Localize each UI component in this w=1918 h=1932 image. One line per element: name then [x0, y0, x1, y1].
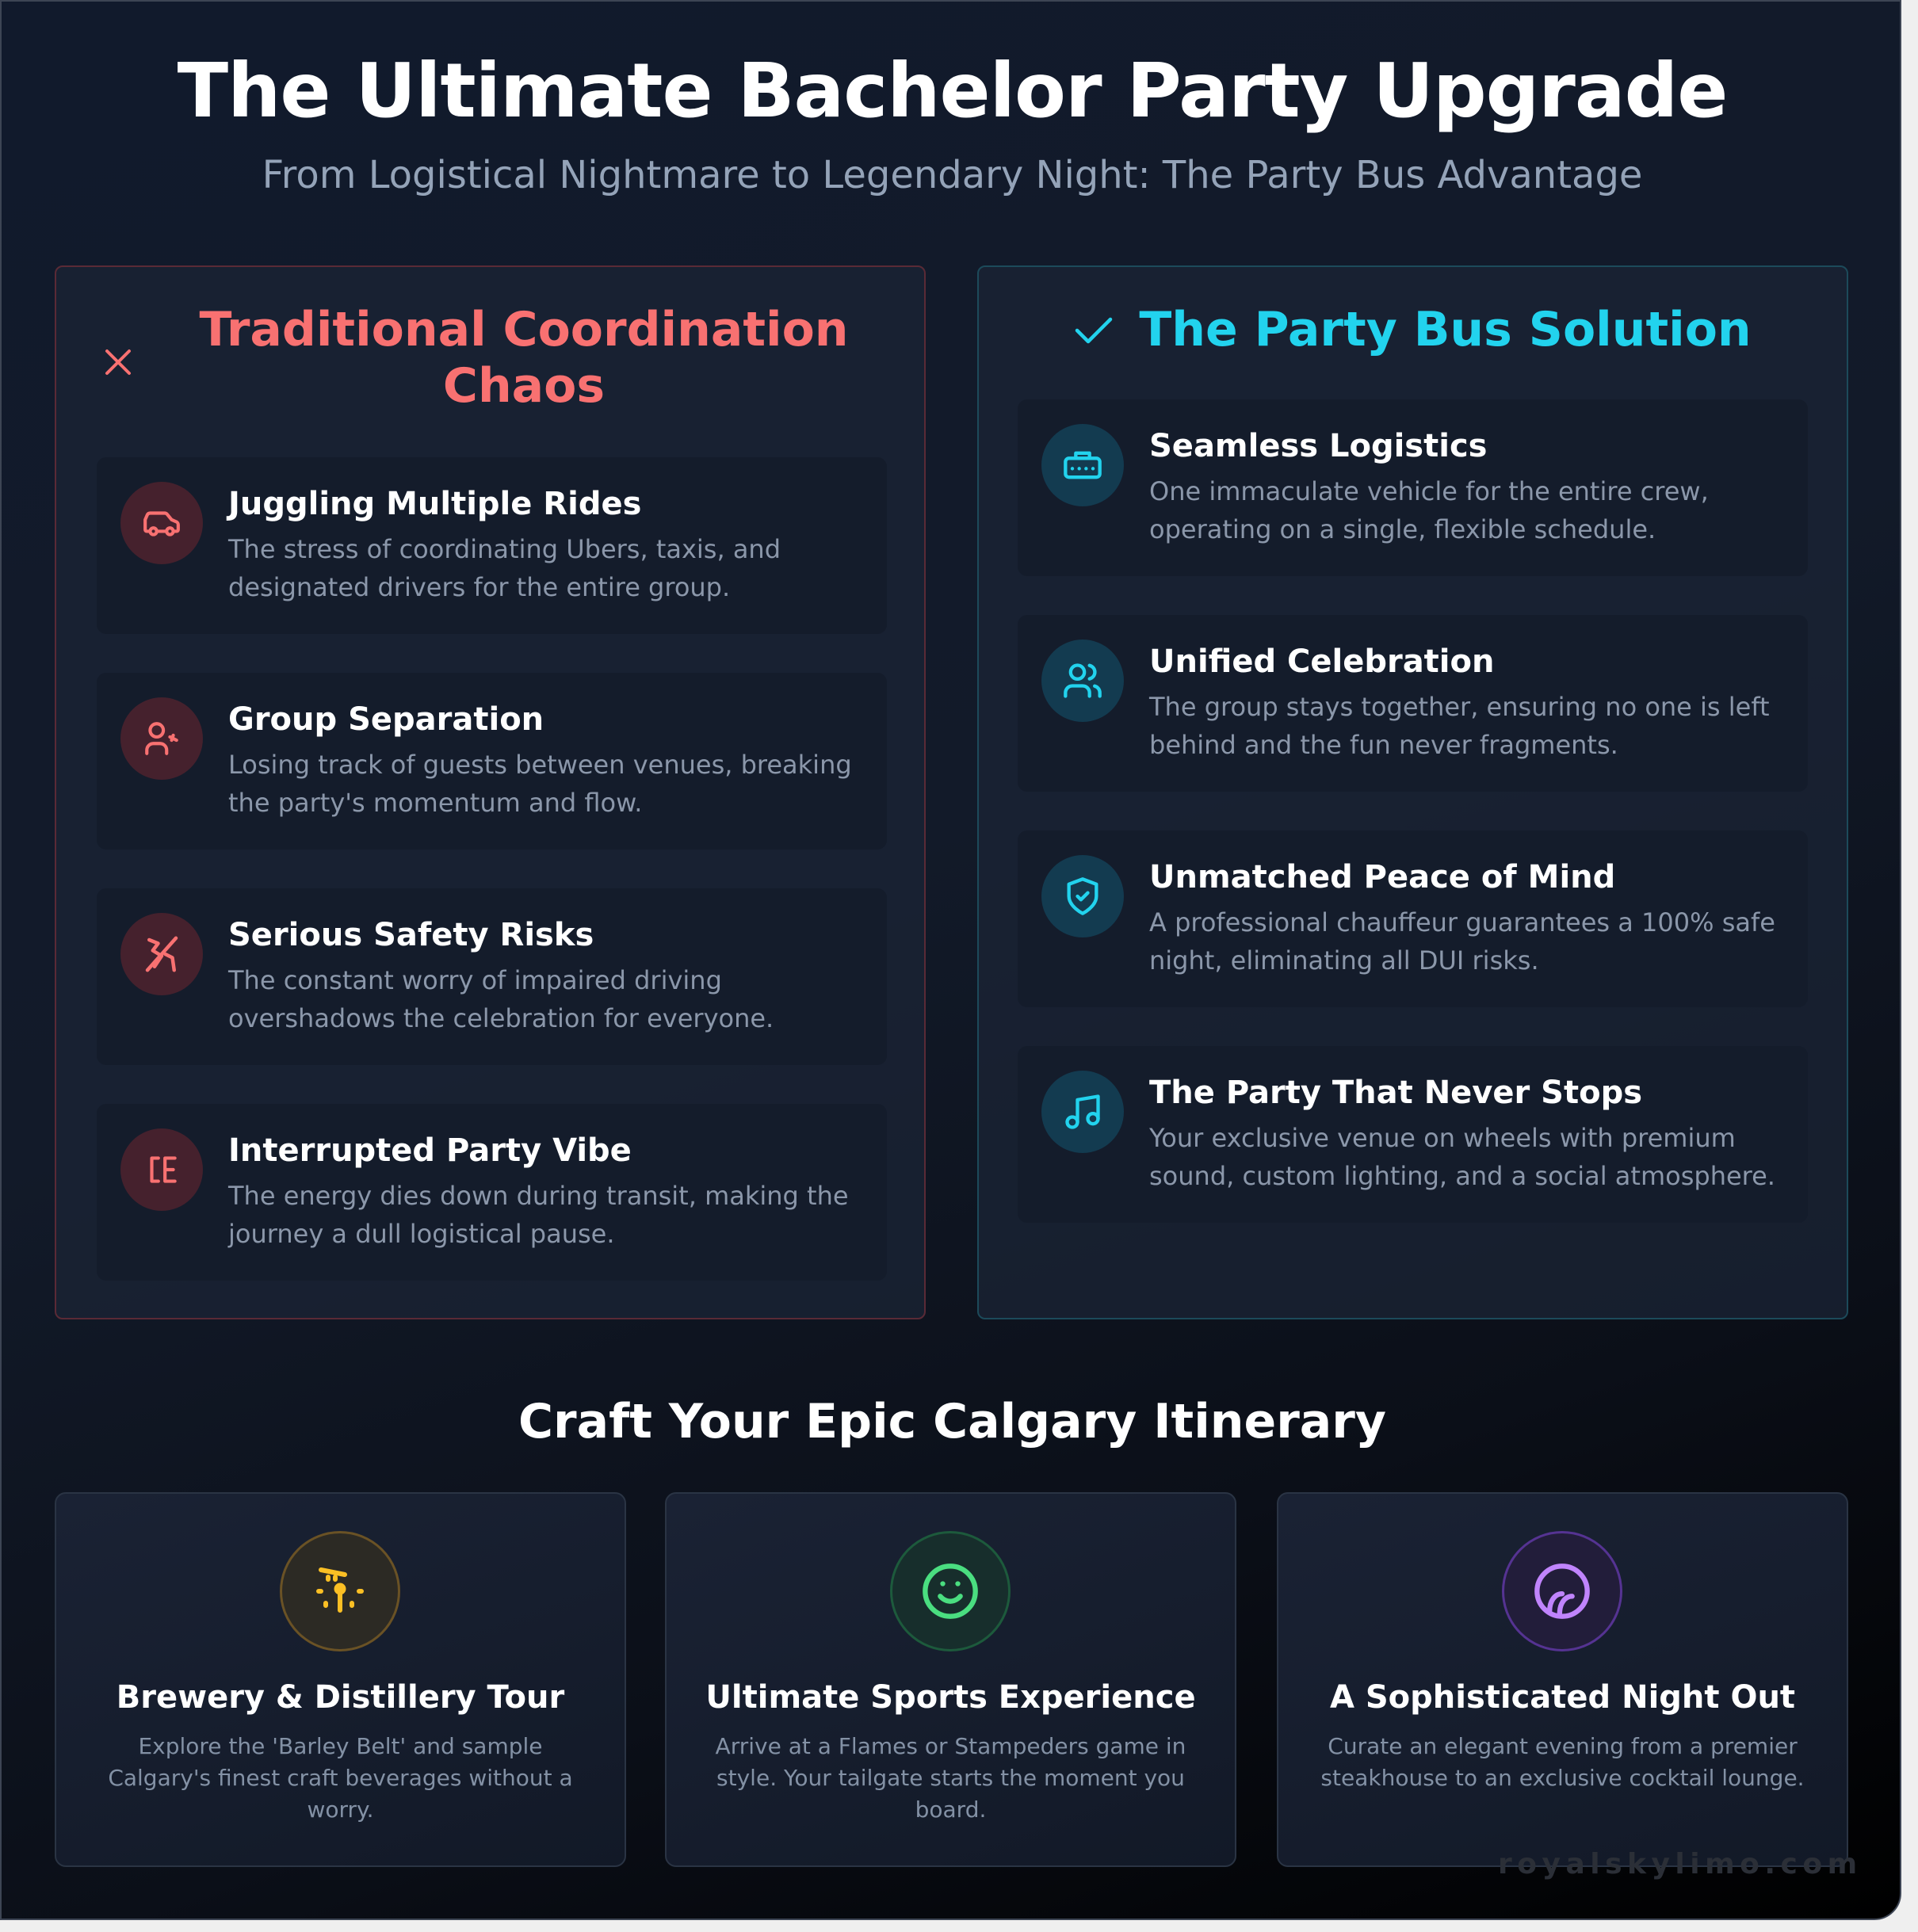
heading: party bus solution: The Party Bus Solution — [1139, 302, 1752, 357]
icon: smiley — [890, 1531, 1011, 1651]
item: group separation: Group Separation — [228, 701, 544, 738]
item: unified celebration — [1018, 615, 1808, 792]
item: safety risks: The constant worry of impaired driving — [228, 965, 722, 995]
icon: music — [1041, 1071, 1124, 1153]
item: unified celebration: The group stays together, ensuring no one is left — [1149, 692, 1770, 722]
item: peace of mind: night, eliminating all DUI risks. — [1149, 945, 1539, 976]
item: juggling rides: designated drivers for the entire group. — [228, 572, 730, 602]
icon: broken — [120, 1128, 203, 1211]
heading: traditional coordination chaos: Traditional Coordination — [199, 302, 849, 357]
item: juggling rides — [97, 457, 887, 634]
icon: x mark — [105, 349, 132, 376]
item: interrupted vibe: The energy dies down during transit, making the — [228, 1181, 849, 1211]
card: sports experience: board. — [915, 1796, 986, 1823]
subtitle: From Logistical Nightmare to Legendary Night: The Party Bus Advantage — [262, 153, 1642, 197]
card: sports experience — [665, 1492, 1236, 1867]
icon: user leaving — [120, 697, 203, 780]
card: sophisticated night: A Sophisticated Night Out — [1330, 1679, 1795, 1716]
card: brewery tour: worry. — [307, 1796, 374, 1823]
item: interrupted vibe — [97, 1104, 887, 1281]
item: juggling rides: Juggling Multiple Rides — [228, 486, 641, 522]
item: group separation: Losing track of guests between venues, breaking — [228, 750, 852, 780]
item: peace of mind: A professional chauffeur guarantees a 100% safe — [1149, 907, 1775, 937]
item: unified celebration: behind and the fun never fragments. — [1149, 730, 1618, 760]
icon: car — [120, 482, 203, 564]
card: sports experience: style. Your tailgate starts the moment you — [716, 1765, 1185, 1791]
item: seamless logistics: operating on a single, flexible schedule. — [1149, 514, 1656, 544]
item: safety risks: overshadows the celebration for everyone. — [228, 1003, 774, 1033]
item: interrupted vibe: Interrupted Party Vibe — [228, 1132, 632, 1169]
card: sophisticated night — [1277, 1492, 1848, 1867]
heading: traditional coordination chaos — [199, 302, 849, 414]
item: interrupted vibe: journey a dull logistical pause. — [228, 1219, 615, 1249]
item: party never stops: The Party That Never Stops — [1149, 1075, 1642, 1111]
item: peace of mind — [1018, 830, 1808, 1007]
item: juggling rides: The stress of coordinating Ubers, taxis, and — [228, 534, 781, 564]
heading: itinerary: Craft Your Epic Calgary Itinerary — [518, 1394, 1386, 1449]
card: sports experience: Arrive at a Flames or Stampeders game in — [716, 1733, 1186, 1759]
card: brewery tour: Explore the 'Barley Belt' and sample — [138, 1733, 543, 1759]
icon: bus — [1041, 424, 1124, 506]
item: group separation — [97, 673, 887, 850]
card: brewery tour: Brewery & Distillery Tour — [117, 1679, 564, 1716]
icon: shield check — [1041, 855, 1124, 937]
panel: traditional chaos — [55, 265, 926, 1319]
icon: users — [1041, 640, 1124, 722]
title: The Ultimate Bachelor Party Upgrade — [178, 48, 1727, 135]
icon: brewery — [280, 1531, 400, 1651]
item: party never stops — [1018, 1046, 1808, 1223]
item: peace of mind: Unmatched Peace of Mind — [1149, 859, 1615, 895]
heading: traditional coordination chaos: Chaos — [443, 358, 605, 414]
card: sports experience: Ultimate Sports Experience — [705, 1679, 1196, 1716]
item: seamless logistics: One immaculate vehicle for the entire crew, — [1149, 476, 1709, 506]
card: sophisticated night: steakhouse to an exclusive cocktail lounge. — [1320, 1765, 1805, 1791]
icon: check — [1075, 317, 1113, 344]
item: party never stops: Your exclusive venue on wheels with premium — [1149, 1123, 1736, 1153]
item: group separation: the party's momentum and flow. — [228, 788, 642, 818]
item: seamless logistics: Seamless Logistics — [1149, 428, 1487, 464]
icon: crossed out drink — [120, 913, 203, 995]
panel: party bus solution — [977, 265, 1848, 1319]
card: brewery tour: Calgary's finest craft beverages without a — [108, 1765, 573, 1791]
item: safety risks — [97, 888, 887, 1065]
card: sophisticated night: Curate an elegant evening from a premier — [1328, 1733, 1798, 1759]
icon: cocktail swirl — [1502, 1531, 1622, 1651]
item: seamless logistics — [1018, 399, 1808, 576]
watermark: royalskylimo.com — [1498, 1848, 1863, 1880]
item: safety risks: Serious Safety Risks — [228, 917, 594, 953]
item: unified celebration: Unified Celebration — [1149, 643, 1494, 680]
card: brewery tour — [55, 1492, 626, 1867]
item: party never stops: sound, custom lighting, and a social atmosphere. — [1149, 1161, 1775, 1191]
